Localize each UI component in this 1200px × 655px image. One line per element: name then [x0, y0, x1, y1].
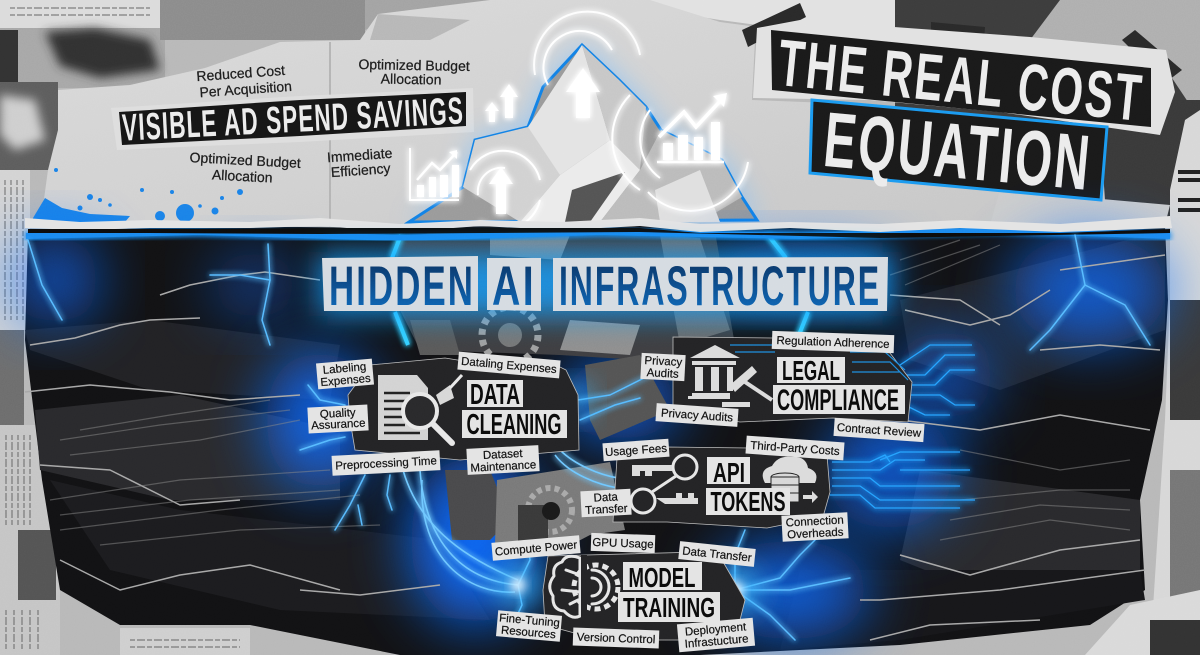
labels: API token costs: [580, 436, 849, 542]
circuit inside legal panel: [730, 345, 908, 380]
labels: data cleaning costs: Dataset: [483, 448, 524, 462]
hidden AI infrastructure heading: INFRASTRUCTURE: [559, 254, 881, 317]
panel: legal compliance: [673, 337, 912, 422]
heading: model training: [618, 562, 720, 623]
labels: API token costs: Connection: [785, 514, 844, 530]
title: The Real Cost Equation: [742, 3, 1182, 207]
labels: data cleaning costs: Expenses: [320, 373, 372, 389]
labels: model training costs: Compute Power: [494, 539, 578, 559]
icon: courthouse and gavel: [688, 345, 772, 407]
text: visible savings sub-labels: Efficiency: [330, 160, 391, 180]
heading: legal compliance: LEGAL: [782, 355, 840, 386]
labels: data cleaning costs: [307, 352, 561, 476]
torn strip edges: [25, 240, 1165, 640]
text: visible savings sub-labels: Per Acquisition: [199, 78, 292, 100]
heading: data cleaning: [462, 379, 567, 441]
heading: legal compliance: [773, 355, 905, 417]
labels: model training costs: Version Control: [576, 632, 655, 646]
icon: brain and gear: [550, 555, 618, 619]
panel: model training: [543, 552, 745, 640]
labels: model training costs: Fine-Tuning: [499, 612, 560, 630]
labels: legal compliance costs: [640, 331, 925, 442]
panel: hidden infrastructure dark underground: [25, 224, 1168, 655]
text: visible savings sub-labels: Allocation: [212, 166, 273, 186]
heading: legal compliance: COMPLIANCE: [777, 384, 899, 417]
labels: data cleaning costs: Preprocessing Time: [335, 455, 437, 473]
heading: model training: TRAINING: [623, 592, 715, 623]
blue paint splatter: [33, 168, 243, 224]
horizontal paper tear and blue seam: [25, 216, 1172, 238]
text: visible savings sub-labels: Allocation: [381, 70, 442, 88]
heading: API tokens: TOKENS: [710, 486, 786, 517]
icon: cloud database: [763, 457, 818, 503]
heading: model training: MODEL: [628, 562, 696, 593]
heading: data cleaning: DATA: [470, 379, 520, 411]
labels: API token costs: Data: [593, 491, 619, 505]
labels: data cleaning costs: Quality: [320, 407, 356, 421]
hidden AI infrastructure heading: AI: [492, 254, 536, 317]
labels: legal compliance costs: Regulation Adherence: [776, 335, 890, 351]
callout: visible ad spend headline: VISIBLE AD SPEND SAVINGS: [121, 90, 465, 150]
panel: main torn paper (visible costs): [40, 0, 1170, 228]
text: visible savings sub-labels: Optimized Budget: [189, 149, 301, 171]
mountain with blue glow: [409, 45, 757, 222]
labels: legal compliance costs: Privacy Audits: [660, 407, 734, 425]
labels: API token costs: Transfer: [585, 503, 628, 517]
text: visible savings sub-labels: Reduced Cost: [196, 62, 286, 84]
text: visible savings sub-labels: [189, 56, 470, 186]
labels: API token costs: Usage Fees: [605, 443, 668, 459]
labels: model training costs: GPU Usage: [592, 537, 654, 551]
heading: API tokens: API: [713, 457, 745, 488]
heading: API tokens: [706, 457, 790, 517]
machinery: gears and engine in the centre: [392, 232, 808, 548]
blue glow patches: [10, 235, 1170, 640]
callout: visible ad spend headline: [111, 88, 474, 150]
labels: model training costs: Data Transfer: [682, 545, 752, 565]
text: visible savings sub-labels: Optimized Budget: [358, 56, 470, 74]
labels: model training costs: [491, 533, 756, 652]
lightning bolts: [28, 235, 1150, 640]
labels: API token costs: Third-Party Costs: [750, 440, 840, 458]
labels: legal compliance costs: Contract Review: [836, 422, 922, 440]
icon: upward arrows and growth charts: [410, 12, 748, 230]
heading: data cleaning: CLEANING: [466, 409, 562, 441]
labels: model training costs: Deployment: [684, 621, 747, 639]
labels: legal compliance costs: Audits: [646, 367, 679, 381]
icon: linked keys: [631, 455, 698, 513]
labels: model training costs: Resources: [500, 625, 557, 641]
panel: data cleaning: [348, 358, 579, 460]
cyan wires to the flash: [403, 450, 618, 592]
labels: API token costs: Overheads: [787, 527, 844, 541]
panel: API tokens: [613, 447, 830, 528]
labels: data cleaning costs: Dataling Expenses: [461, 356, 557, 376]
icon: document with magnifier: [378, 375, 462, 443]
circuit traces: [830, 345, 975, 508]
labels: data cleaning costs: Assurance: [311, 418, 366, 432]
text: visible savings sub-labels: Immediate: [326, 145, 393, 165]
labels: model training costs: Infrastucture: [684, 633, 749, 651]
labels: legal compliance costs: Privacy: [644, 355, 683, 369]
energy flashes: [496, 384, 759, 614]
labels: data cleaning costs: Labeling: [322, 361, 367, 377]
hidden AI infrastructure heading: HIDDEN: [329, 254, 475, 317]
hidden AI infrastructure heading: [318, 252, 892, 317]
labels: data cleaning costs: Maintenance: [470, 459, 537, 475]
